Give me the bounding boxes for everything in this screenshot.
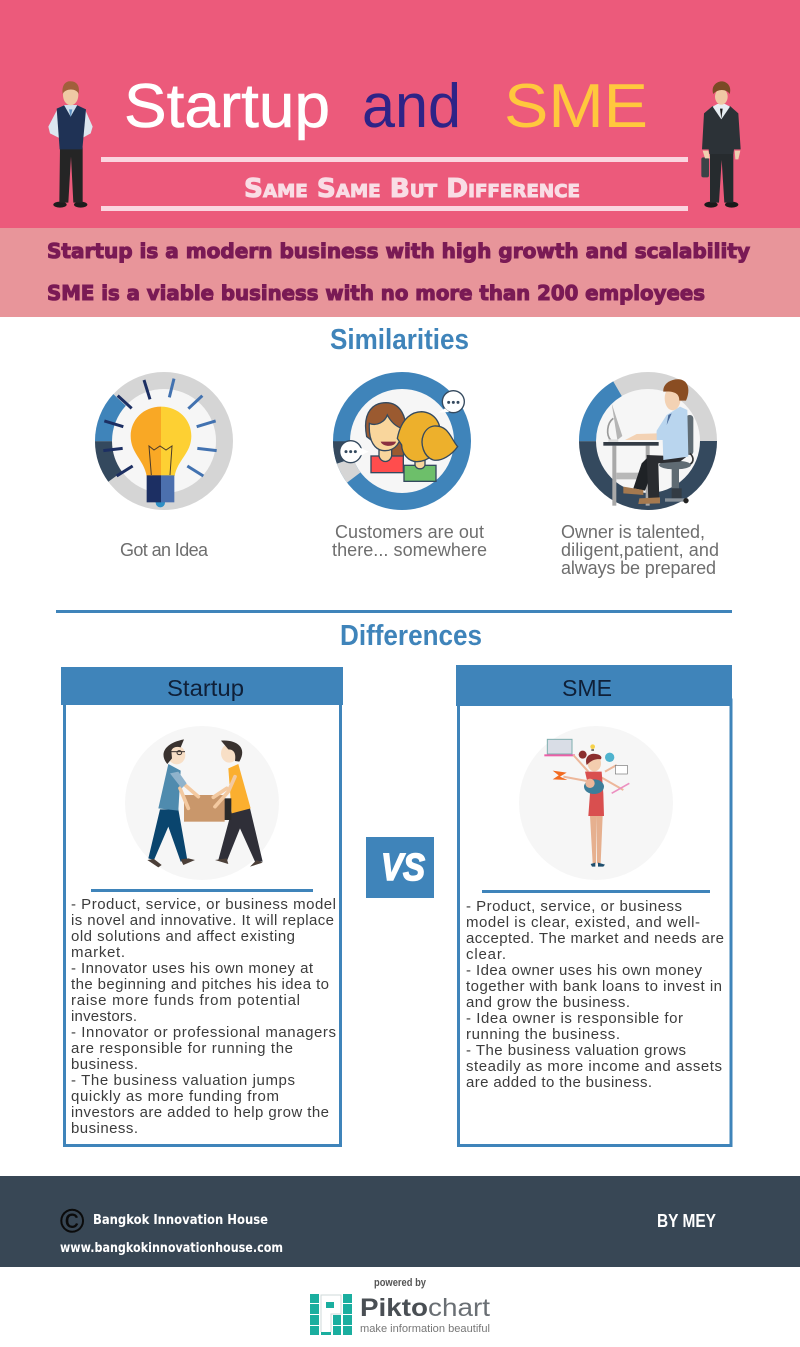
illustration: two men carrying a box [125, 726, 279, 880]
text block: SME points: and grow the business. [466, 994, 630, 1011]
text block: startup points: market. [71, 944, 125, 961]
caption: owner: Owner is talented, [561, 522, 705, 542]
text block: SME points: together with bank loans to invest in [466, 978, 722, 995]
text block: SME points [466, 898, 724, 1091]
panel: definitions [0, 228, 800, 317]
panel: SME [456, 665, 732, 1146]
logo: Piktochart: chart [428, 1294, 490, 1322]
logo: Piktochart: make information beautiful [360, 1323, 490, 1335]
footer: organisation: Bangkok Innovation House [93, 1213, 268, 1228]
text block: startup points: old solutions and affect existing [71, 928, 295, 945]
text block: startup points: - Innovator uses his own money at [71, 960, 314, 977]
heading: startup: Startup [167, 675, 244, 701]
caption: idea: Got an Idea [120, 540, 209, 560]
text block: startup points: the beginning and pitches his idea to [71, 976, 329, 993]
definition: startup: Startup is a modern business with high growth and scalability [47, 239, 750, 263]
text block: startup points: raise more funds from potential [71, 992, 300, 1009]
text block: startup points: - The business valuation jumps [71, 1072, 295, 1089]
icon: light bulb [103, 379, 224, 507]
icon: owner at desk [588, 379, 708, 506]
subtitle: Same Same But Difference [244, 174, 580, 204]
caption: owner [561, 522, 719, 578]
text block: SME points: accepted. The market and needs are [466, 930, 724, 947]
text block: SME points: steadily as more income and assets [466, 1058, 722, 1075]
text block: startup points: business. [71, 1120, 138, 1137]
text block: SME points: - Idea owner is responsible for [466, 1010, 683, 1027]
footer: website: www.bangkokinnovationhouse.com [60, 1241, 283, 1256]
title: and [362, 72, 461, 141]
text block: startup points: is novel and innovative. It will replace [71, 912, 334, 929]
icon: man in vest [48, 81, 93, 208]
text block: SME points: are added to the business. [466, 1074, 652, 1091]
text block: startup points: are responsible for running the [71, 1040, 293, 1057]
text block: startup points [71, 896, 336, 1137]
title: Startup [124, 72, 330, 141]
heading: SME: SME [562, 675, 612, 701]
text block: startup points: - Product, service, or business model [71, 896, 336, 913]
text block: startup points: - Innovator or professional managers [71, 1024, 336, 1041]
definition: SME: SME is a viable business with no more than 200 employees [47, 281, 705, 305]
text block: startup points: business. [71, 1056, 138, 1073]
text block: SME points: model is clear, existed, and well- [466, 914, 700, 931]
text block: SME points: running the business. [466, 1026, 620, 1043]
text block: SME points: - Product, service, or business [466, 898, 682, 915]
text block: SME points: clear. [466, 946, 506, 963]
icon: man in suit with briefcase [701, 81, 741, 208]
badge: VS [366, 837, 434, 898]
heading: similarities: Similarities [330, 324, 469, 356]
caption: customers: Customers are out [335, 522, 484, 542]
text block: SME points: - The business valuation grows [466, 1042, 686, 1059]
title: SME [504, 72, 648, 141]
caption: customers [332, 522, 487, 560]
caption: owner: diligent,patient, and [561, 540, 719, 560]
panel: startup [61, 667, 343, 1146]
caption: owner: always be prepared [561, 558, 716, 578]
text block: startup points: investors. [71, 1008, 137, 1025]
illustration: multitasking woman [519, 726, 673, 880]
panel: header [0, 0, 800, 228]
icon: copyright: © [60, 1202, 84, 1239]
logo: Piktochart: Pikto [360, 1294, 428, 1322]
text block: startup points: investors are added to help grow the [71, 1104, 329, 1121]
badge: VS: VS [381, 847, 425, 889]
text block: startup points: quickly as more funding from [71, 1088, 279, 1105]
text block: SME points: - Idea owner uses his own money [466, 962, 702, 979]
caption: customers: there... somewhere [332, 540, 487, 560]
heading: differences: Differences [340, 620, 482, 652]
title [124, 72, 648, 141]
logo: Piktochart [310, 1277, 490, 1335]
footer: author: BY MEY [657, 1211, 716, 1231]
panel: footer [0, 1176, 800, 1267]
icon: customers [340, 380, 464, 502]
icon: Piktochart mark [310, 1294, 352, 1335]
logo: Piktochart: powered by [374, 1277, 427, 1289]
